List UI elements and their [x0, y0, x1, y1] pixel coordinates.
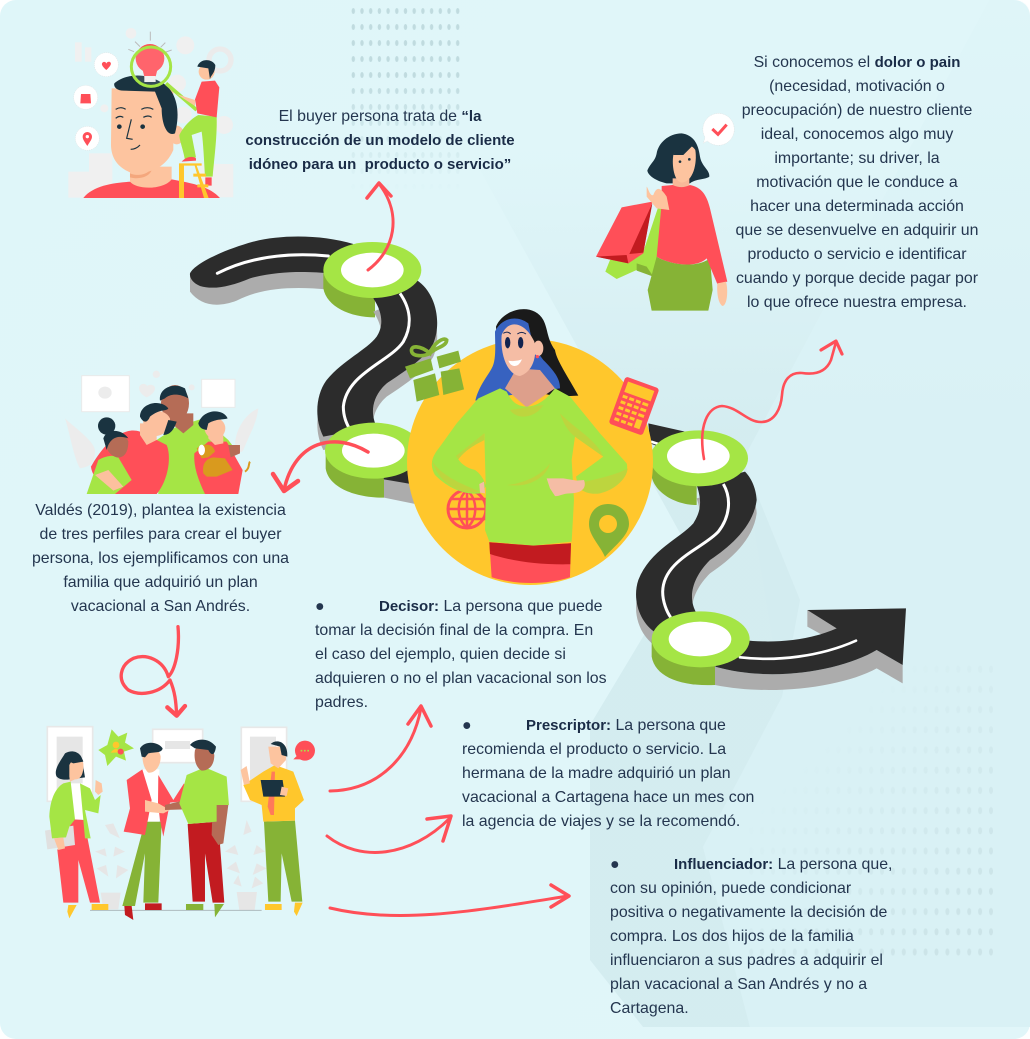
disc 3 side [651, 458, 697, 505]
text block: dolor o pain: preocupación) de nuestro cliente [742, 102, 972, 119]
text block: Valdés three profiles: vacacional a San Andrés. [71, 598, 250, 615]
text block: dolor o pain: cuando y porque decide pagar por [736, 270, 978, 287]
text block: dolor o pain: ideal, conocemos algo muy [761, 126, 953, 143]
road: lower section with arrow [636, 423, 906, 690]
text block: dolor o pain: importante; su driver, la [774, 150, 940, 167]
text block: Decisor: tomar la decisión final de la compra. En [315, 622, 593, 639]
disc 1 top [323, 242, 421, 298]
text block: Prescriptor: recomienda el producto o servicio. La [462, 741, 726, 758]
arrow: squiggle to pain text [702, 341, 842, 459]
text block: Prescriptor: la agencia de viajes y se la recomendó. [462, 813, 740, 830]
arrow: loop to team [121, 627, 185, 716]
road A shadow [190, 270, 327, 305]
text block: buyer persona definition: construcción de un modelo de cliente [245, 132, 515, 149]
text block: Decisor: el caso del ejemplo, quien decide si [315, 646, 566, 663]
text block: Decisor [315, 598, 607, 711]
illustration: family [65, 371, 258, 494]
text block: dolor o pain: (necesidad, motivación o [769, 78, 945, 95]
left gap between arm and body [457, 433, 486, 485]
man handshake 2 [188, 822, 224, 903]
text block: Prescriptor: Prescriptor: La persona que [526, 717, 726, 734]
text block: Decisor: Decisor: La persona que puede [379, 598, 602, 615]
text block: Influenciador: ● [610, 856, 620, 873]
text block: Influenciador [610, 856, 892, 1017]
speech bubble [703, 113, 734, 145]
text block: Prescriptor: vacacional a Cartagena hace un mes con [462, 789, 754, 806]
text block: Influenciador: Cartagena. [610, 1000, 689, 1017]
text block: Decisor: adquieren o no el plan vacacional son los [315, 670, 607, 687]
woman [57, 819, 100, 903]
text block: Decisor: padres. [315, 694, 368, 711]
illustration: woman with shopping bags [596, 113, 734, 311]
text block: dolor o pain: producto o servicio e identificar [747, 246, 967, 263]
icon: globe [448, 490, 486, 528]
burst [98, 729, 134, 766]
man with tablet [264, 821, 302, 902]
skirt [489, 542, 571, 583]
central circle with woman [407, 309, 653, 585]
text block: buyer persona definition [245, 108, 515, 173]
face [501, 324, 535, 376]
text block: Prescriptor: ● [462, 717, 472, 734]
text block: dolor o pain: hacer una determinada acción [750, 198, 964, 215]
text block: dolor o pain: motivación que le conduce a [756, 174, 958, 191]
arrow: to family [273, 442, 368, 491]
disc 4 [652, 639, 715, 685]
road B [317, 293, 437, 450]
text block: Valdés three profiles: familia que adquirió un plan [63, 574, 258, 591]
text block: dolor o pain: Si conocemos el dolor o pain [754, 54, 960, 71]
text block: Influenciador: Influenciador: La persona que, [674, 856, 892, 873]
text block: Influenciador: influenciaron a sus padres a adquirir el [610, 952, 883, 969]
text block: Prescriptor: hermana de la madre adquirió un plan [462, 765, 731, 782]
arrow: to Prescriptor [327, 816, 451, 852]
neck [505, 368, 555, 407]
sweater [432, 388, 627, 546]
text block: Influenciador: positiva o negativamente la decisión de [610, 904, 887, 921]
text block: dolor o pain: que se desenvuelve en adquirir un [736, 222, 978, 239]
text block: dolor o pain [736, 54, 978, 311]
road D underside [715, 650, 903, 690]
text block: buyer persona definition: El buyer persona trata de “la [279, 108, 481, 125]
text block: Valdés three profiles: persona, los ejemplificamos con una [32, 550, 289, 567]
arrow: to Influenciador [330, 885, 569, 916]
text block: Valdés three profiles [32, 502, 289, 615]
text block: Prescriptor [462, 717, 754, 830]
road D top [715, 608, 906, 674]
disc 2 [326, 451, 384, 498]
text block: Influenciador: con su opinión, puede condicionar [610, 880, 851, 897]
disc 3 top [650, 430, 748, 486]
disc 1 side [323, 270, 375, 317]
text block: dolor o pain: lo que ofrece nuestra empresa. [747, 294, 967, 311]
man handshake 1 [122, 822, 162, 906]
hair back [496, 309, 578, 397]
arrow: to Decisor [330, 706, 431, 791]
illustration: team of four people [45, 727, 315, 920]
arrow: to buyer persona text [367, 183, 393, 270]
icon: calculator [609, 376, 659, 436]
text block: Valdés three profiles: de tres perfiles para crear el buyer [39, 526, 282, 543]
road C [636, 472, 757, 633]
text block: Influenciador: compra. Los dos hijos de la familia [610, 928, 854, 945]
illustration: man with idea [68, 28, 233, 198]
road: upper section [190, 237, 437, 508]
text block: Valdés three profiles: Valdés (2019), plantea la existencia [35, 502, 286, 519]
icon: gift [405, 339, 464, 402]
text block: Influenciador: plan vacacional a San Andrés y no a [610, 976, 867, 993]
hand [547, 478, 585, 496]
road C shadow [636, 485, 757, 647]
text block: Decisor: ● [315, 598, 325, 615]
road A [190, 237, 353, 288]
chat bubble [295, 741, 315, 761]
text block: buyer persona definition: idóneo para un producto o servicio” [249, 156, 511, 173]
icon: location pin [589, 504, 629, 557]
